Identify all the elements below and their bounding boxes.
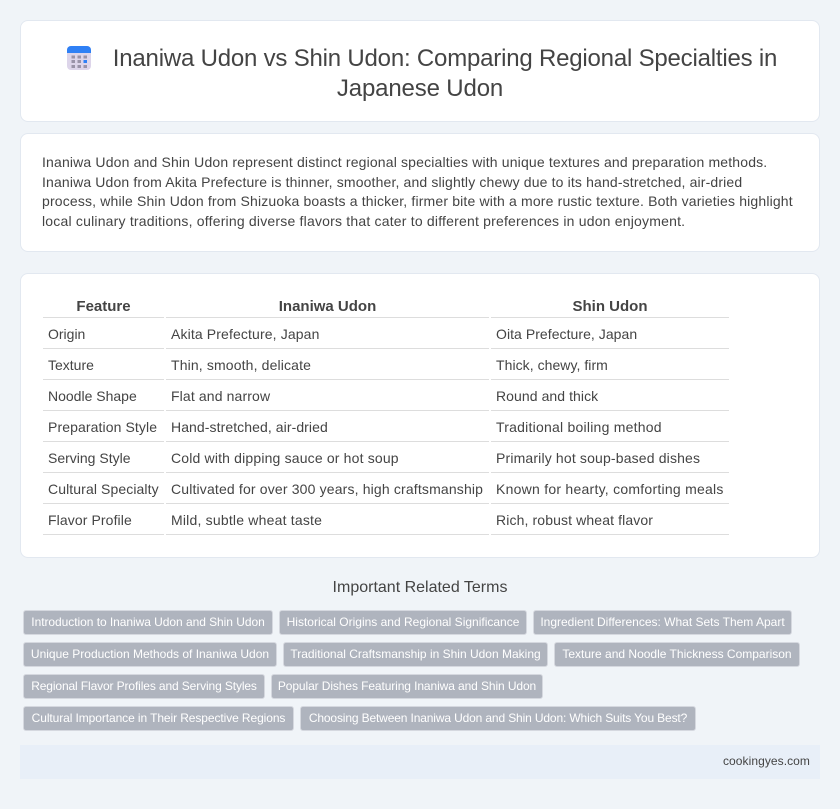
row: texture: Texture bbox=[48, 357, 94, 373]
row: flavor profile: Mild, subtle wheat taste bbox=[171, 512, 322, 528]
row: noodle shape bbox=[48, 388, 598, 404]
row: serving style: Cold with dipping sauce or hot soup bbox=[171, 450, 399, 466]
row: cultural specialty: Known for hearty, comforting meals bbox=[496, 481, 724, 497]
related terms tags: Unique Production Methods of Inaniwa Udon bbox=[31, 647, 269, 661]
summary text: Inaniwa Udon from Akita Prefecture is thinner, smoother, and slightly chewy due to its hand-stretched, air-dried bbox=[42, 174, 742, 190]
table header: Inaniwa Udon bbox=[279, 298, 376, 315]
row: origin: Origin bbox=[48, 326, 85, 342]
footer source: cookingyes.com bbox=[723, 754, 810, 768]
related terms tags: Traditional Craftsmanship in Shin Udon Making bbox=[290, 647, 541, 661]
row: serving style: Serving Style bbox=[48, 450, 130, 466]
row: preparation style: Preparation Style bbox=[48, 419, 157, 435]
row: cultural specialty bbox=[48, 481, 724, 497]
title bbox=[113, 45, 777, 102]
related terms tags: Cultural Importance in Their Respective Regions bbox=[32, 711, 285, 725]
row: texture: Thin, smooth, delicate bbox=[171, 357, 311, 373]
header panel bbox=[20, 20, 820, 122]
related terms tags: Texture and Noodle Thickness Comparison bbox=[562, 647, 792, 661]
row: flavor profile bbox=[48, 512, 653, 528]
row: texture: Thick, chewy, firm bbox=[496, 357, 608, 373]
row: serving style: Primarily hot soup-based dishes bbox=[496, 450, 700, 466]
summary panel bbox=[20, 133, 820, 252]
summary text: Inaniwa Udon and Shin Udon represent distinct regional specialties with unique textures and preparation methods. bbox=[42, 154, 767, 170]
icon: calendar bbox=[67, 46, 91, 70]
related terms tags bbox=[23, 610, 800, 731]
row: noodle shape: Round and thick bbox=[496, 388, 598, 404]
summary text: local culinary traditions, offering diverse flavors that cater to different preferences in udon enjoyment. bbox=[42, 213, 685, 229]
row: serving style bbox=[48, 450, 700, 466]
summary text bbox=[42, 154, 793, 229]
table header bbox=[76, 298, 648, 315]
row: origin bbox=[48, 326, 637, 342]
row: origin: Oita Prefecture, Japan bbox=[496, 326, 637, 342]
row: preparation style bbox=[48, 419, 662, 435]
row: cultural specialty: Cultivated for over 300 years, high craftsmanship bbox=[171, 481, 483, 497]
row: cultural specialty: Cultural Specialty bbox=[48, 481, 159, 497]
table header: Feature bbox=[76, 298, 131, 315]
comparison table panel bbox=[20, 273, 820, 558]
related terms tags: Choosing Between Inaniwa Udon and Shin Udon: Which Suits You Best? bbox=[309, 711, 687, 725]
related terms tags: Popular Dishes Featuring Inaniwa and Shin Udon bbox=[278, 679, 536, 693]
row: preparation style: Hand-stretched, air-dried bbox=[171, 419, 328, 435]
row: noodle shape: Noodle Shape bbox=[48, 388, 137, 404]
footer bar bbox=[20, 745, 820, 779]
row: noodle shape: Flat and narrow bbox=[171, 388, 270, 404]
row: texture bbox=[48, 357, 608, 373]
related terms tags: Regional Flavor Profiles and Serving Styles bbox=[31, 679, 257, 693]
related terms tags: Introduction to Inaniwa Udon and Shin Udon bbox=[31, 615, 265, 629]
table header: Shin Udon bbox=[572, 298, 648, 315]
related terms heading: Important Related Terms bbox=[333, 579, 507, 596]
row: preparation style: Traditional boiling method bbox=[496, 419, 662, 435]
row: flavor profile: Flavor Profile bbox=[48, 512, 132, 528]
related terms tags: Historical Origins and Regional Significance bbox=[287, 615, 519, 629]
title: Inaniwa Udon vs Shin Udon: Comparing Regional Specialties in bbox=[113, 45, 777, 72]
row: flavor profile: Rich, robust wheat flavor bbox=[496, 512, 653, 528]
title: Japanese Udon bbox=[337, 75, 503, 102]
summary text: process, while Shin Udon from Shizuoka boasts a thicker, firmer bite with a more rustic texture. Both varieties highlight bbox=[42, 193, 793, 209]
related terms tags: Ingredient Differences: What Sets Them Apart bbox=[540, 615, 785, 629]
row: origin: Akita Prefecture, Japan bbox=[171, 326, 320, 342]
